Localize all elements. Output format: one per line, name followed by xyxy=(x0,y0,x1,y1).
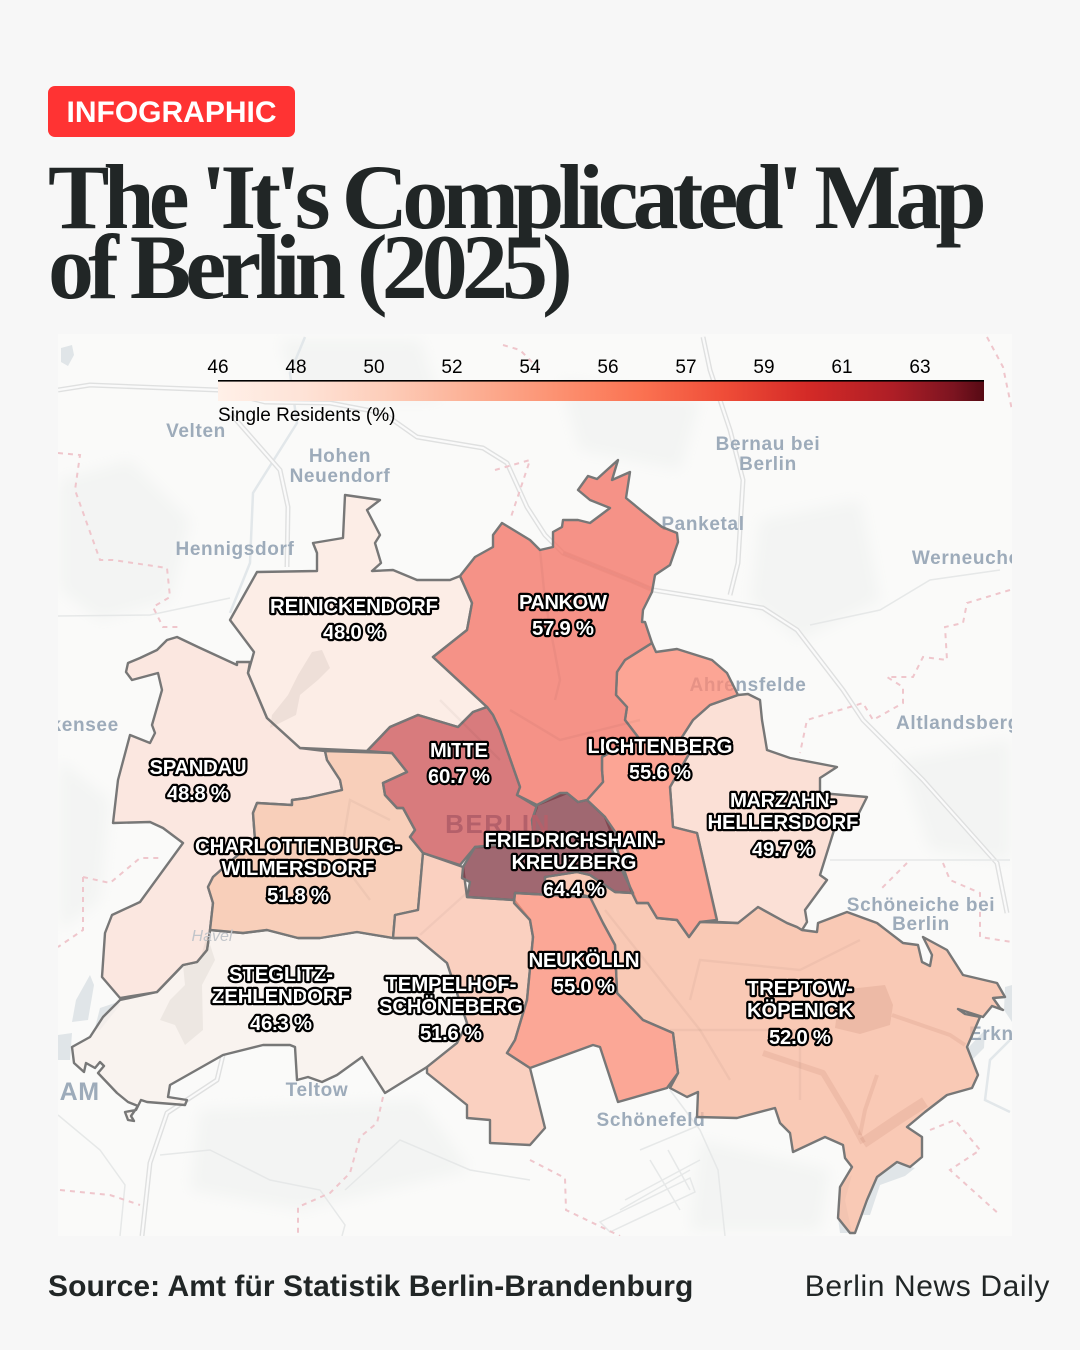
place names: Hohen xyxy=(309,446,371,467)
legend title: Single Residents (%) xyxy=(218,405,395,426)
place names: Schönefeld xyxy=(597,1110,705,1131)
legend gradient bar xyxy=(218,381,984,401)
colour legend xyxy=(207,357,984,426)
city label BERLIN: BERLIN xyxy=(445,809,551,839)
label: Reinickendorf xyxy=(270,595,438,644)
label: Treptow-Koepenick: TREPTOW- xyxy=(747,977,853,1000)
label: Spandau xyxy=(150,756,246,805)
source credit: Source: Amt für Statistik Berlin-Brandenburg xyxy=(48,1270,693,1303)
label: Treptow-Koepenick: 52.0 % xyxy=(769,1026,831,1049)
label: Spandau: SPANDAU xyxy=(150,756,246,779)
label: Steglitz-Zehlendorf: STEGLITZ- xyxy=(229,963,333,986)
legend tick labels: 63 xyxy=(909,357,931,378)
label: Marzahn-Hellersdorf: MARZAHN- xyxy=(730,789,836,812)
label: Tempelhof-Schoeneberg xyxy=(379,973,523,1045)
label: Spandau: 48.8 % xyxy=(167,782,229,805)
label: Tempelhof-Schoeneberg: SCHÖNEBERG xyxy=(379,995,523,1018)
label: Steglitz-Zehlendorf: ZEHLENDORF xyxy=(212,985,350,1008)
place names: Ahrensfelde xyxy=(690,675,806,696)
label: Reinickendorf: REINICKENDORF xyxy=(270,595,438,618)
place names: Berlin xyxy=(892,914,950,935)
label: Mitte: 60.7 % xyxy=(428,765,490,788)
label: Treptow-Koepenick xyxy=(747,977,853,1049)
label: Friedrichshain-Kreuzberg: KREUZBERG xyxy=(512,851,636,874)
label: Reinickendorf: 48.0 % xyxy=(323,621,385,644)
label: Pankow xyxy=(519,591,608,640)
label: Pankow: 57.9 % xyxy=(532,617,594,640)
label: Charlottenburg-Wilmersdorf xyxy=(195,835,401,907)
label: Tempelhof-Schoeneberg: TEMPELHOF- xyxy=(386,973,516,996)
Mueggelsee xyxy=(835,985,893,1034)
place names: Neuendorf xyxy=(290,466,390,487)
district: Reinickendorf xyxy=(230,495,487,751)
legend tick labels: 52 xyxy=(441,357,463,378)
label: Neukoelln: NEUKÖLLN xyxy=(528,949,640,972)
map panel with colour legend xyxy=(58,336,1012,1236)
place names: Werneuchen xyxy=(912,548,1032,569)
place names: Erkner xyxy=(969,1024,1033,1045)
label: Tempelhof-Schoeneberg: 51.6 % xyxy=(420,1022,482,1045)
place names: Panketal xyxy=(661,514,745,535)
place names: Schöneiche bei xyxy=(847,895,995,916)
label: Steglitz-Zehlendorf xyxy=(212,963,350,1035)
lakes and rivers inside districts xyxy=(160,650,965,1143)
place names: Hennigsdorf xyxy=(175,539,295,560)
label: Lichtenberg: LICHTENBERG xyxy=(588,735,732,758)
label: Marzahn-Hellersdorf: HELLERSDORF xyxy=(708,811,858,834)
place names: Teltow xyxy=(286,1080,348,1101)
legend tick labels: 50 xyxy=(363,357,385,378)
label: Marzahn-Hellersdorf: 49.7 % xyxy=(752,838,814,861)
district: Steglitz-Zehlendorf xyxy=(72,930,467,1121)
label: Friedrichshain-Kreuzberg xyxy=(484,829,664,901)
place names: Bernau bei xyxy=(716,434,820,455)
district: Marzahn-Hellersdorf xyxy=(670,694,867,930)
place names: Altlandsberg xyxy=(896,713,1020,734)
label: Lichtenberg xyxy=(588,735,732,784)
legend tick labels: 59 xyxy=(753,357,775,378)
district: Pankow xyxy=(433,460,678,805)
label: Charlottenburg-Wilmersdorf: 51.8 % xyxy=(267,884,329,907)
district: Spandau xyxy=(102,637,342,998)
title: of Berlin (2025) xyxy=(48,216,567,318)
legend tick labels xyxy=(207,357,931,378)
basemap xyxy=(0,334,1033,1236)
district: Tempelhof-Schoeneberg xyxy=(393,853,545,1145)
rivers in Treptow-Koepenick xyxy=(763,1015,965,1143)
label: Friedrichshain-Kreuzberg: 64.4 % xyxy=(543,878,605,901)
legend tick labels: 61 xyxy=(831,357,853,378)
legend tick labels: 56 xyxy=(597,357,619,378)
place names: Falkensee xyxy=(21,715,119,736)
brand name: Berlin News Daily xyxy=(805,1270,1050,1303)
district: Friedrichshain-Kreuzberg xyxy=(462,793,633,900)
legend tick labels: 46 xyxy=(207,357,229,378)
place names: Velten xyxy=(166,421,226,442)
place names xyxy=(0,421,1033,1131)
district: Mitte xyxy=(367,707,537,865)
inner road lines xyxy=(340,550,860,1100)
label: Steglitz-Zehlendorf: 46.3 % xyxy=(250,1012,312,1035)
label: Lichtenberg: 55.6 % xyxy=(629,761,691,784)
district: Lichtenberg xyxy=(587,643,738,937)
water label Havel: Havel xyxy=(192,928,233,945)
label: Charlottenburg-Wilmersdorf: CHARLOTTENBURG- xyxy=(195,835,401,858)
district labels xyxy=(150,591,858,1049)
district: Charlottenburg-Wilmersdorf xyxy=(208,751,423,938)
label: Mitte xyxy=(428,739,490,788)
label: Treptow-Koepenick: KÖPENICK xyxy=(747,999,853,1022)
district: Treptow-Koepenick xyxy=(545,872,1005,1233)
label: Marzahn-Hellersdorf xyxy=(708,789,858,861)
legend top axis xyxy=(218,380,984,382)
title xyxy=(48,146,983,318)
district: Neukoelln xyxy=(507,893,678,1102)
title: The 'It's Complicated' Map xyxy=(48,146,981,248)
label: Friedrichshain-Kreuzberg: FRIEDRICHSHAIN- xyxy=(484,829,664,852)
Grunewald lakes xyxy=(160,935,215,1045)
label: Mitte: MITTE xyxy=(430,739,488,762)
legend tick labels: 48 xyxy=(285,357,307,378)
legend tick labels: 54 xyxy=(519,357,541,378)
place names: Berlin xyxy=(739,454,797,475)
badge: INFOGRAPHIC: INFOGRAPHIC xyxy=(66,96,276,129)
label: Charlottenburg-Wilmersdorf: WILMERSDORF xyxy=(222,857,374,880)
legend tick labels: 57 xyxy=(675,357,697,378)
label: Neukoelln: 55.0 % xyxy=(553,975,615,998)
district choropleth xyxy=(72,460,1005,1233)
label: Neukoelln xyxy=(528,949,640,998)
label: Pankow: PANKOW xyxy=(519,591,608,614)
Tegel lake xyxy=(270,650,330,728)
badge: INFOGRAPHIC xyxy=(48,86,295,137)
